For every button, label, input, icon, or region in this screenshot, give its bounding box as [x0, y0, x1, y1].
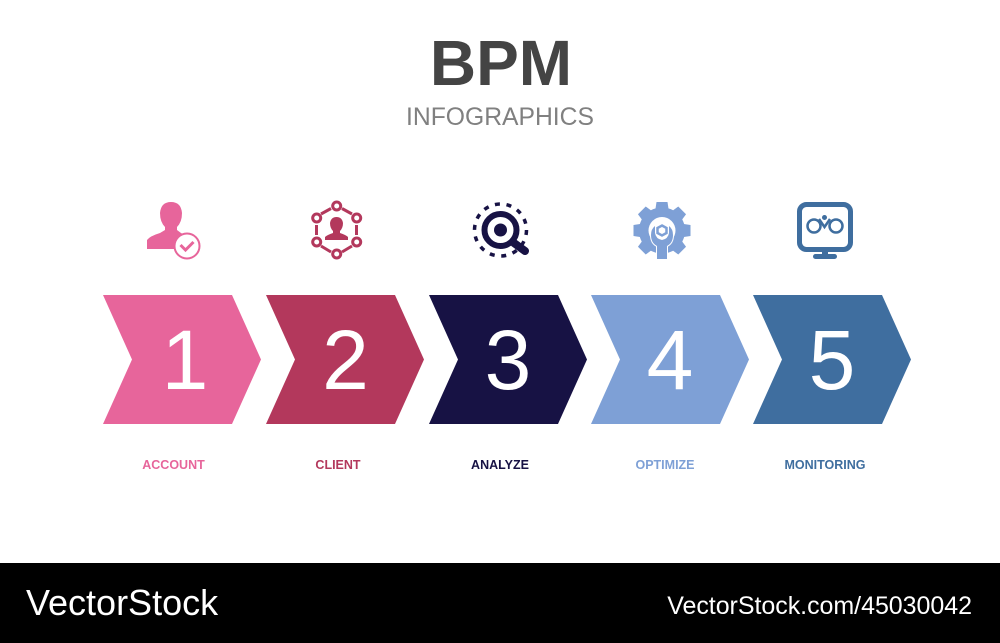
label: monitoring: MONITORING — [784, 458, 866, 472]
chevron 4 — [591, 295, 749, 424]
label: client: CLIENT — [315, 458, 361, 472]
icon: analyze magnifier — [474, 204, 526, 256]
footer brand: VectorStock — [26, 582, 218, 623]
footer bar — [0, 563, 1000, 643]
chevron 5: 5 — [809, 313, 855, 407]
label: account: ACCOUNT — [142, 458, 205, 472]
label: optimize: OPTIMIZE — [635, 458, 695, 472]
icon: monitoring screen — [800, 204, 850, 259]
chevron 2 — [266, 295, 424, 424]
chevron 2: 2 — [322, 313, 369, 407]
label: analyze: ANALYZE — [471, 458, 529, 472]
icon: account — [147, 202, 200, 258]
title: BPM — [430, 27, 572, 99]
chevron 3: 3 — [485, 313, 531, 407]
chevron 4: 4 — [647, 313, 693, 407]
subtitle: INFOGRAPHICS — [406, 104, 594, 131]
chevron 1: 1 — [162, 313, 208, 407]
chevron 3 — [429, 295, 587, 424]
chevron 1 — [103, 295, 261, 424]
footer url: VectorStock.com/45030042 — [667, 592, 972, 620]
icon: client network — [313, 202, 361, 258]
chevron 5 — [753, 295, 911, 424]
icon: optimize gear — [634, 202, 690, 259]
